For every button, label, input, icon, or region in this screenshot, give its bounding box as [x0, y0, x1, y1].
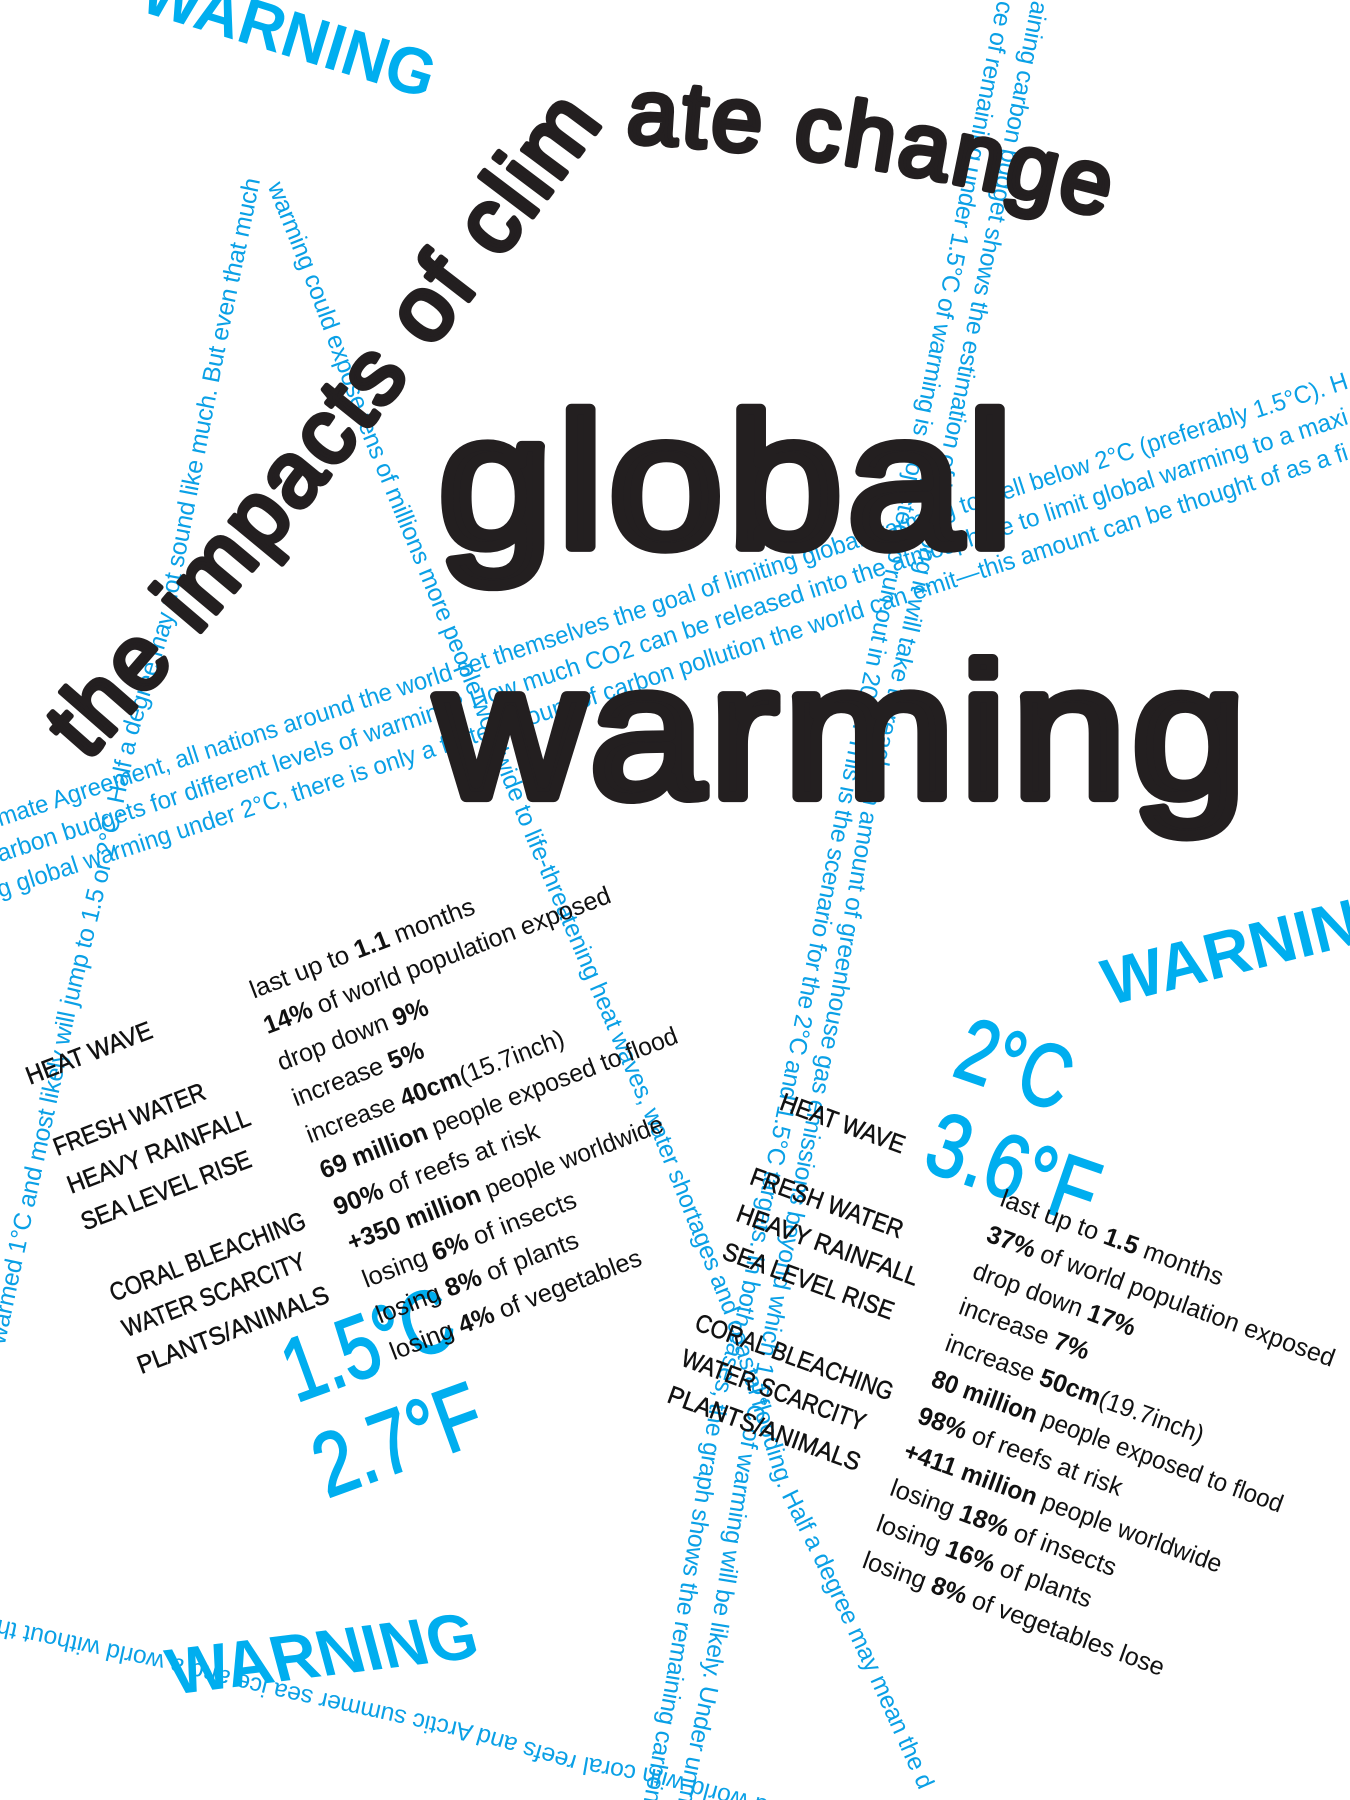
impact labels 1.5°C column: PLANTS/ANIMALS	[133, 1281, 333, 1380]
impact values 2°C column	[859, 1185, 1339, 1682]
impact labels 2°C column: HEAVY RAINFALL	[733, 1200, 922, 1291]
impact values 2°C column: last up to 1.5 months	[997, 1185, 1227, 1291]
impact labels 1.5°C column	[22, 1017, 333, 1380]
impact values 1.5°C column: 90% of reefs at risk	[330, 1117, 544, 1221]
impact labels 2°C column: CORAL BLEACHING	[691, 1309, 897, 1406]
impact values 1.5°C column: losing 6% of insects	[358, 1186, 581, 1294]
main title: global: global	[439, 375, 1013, 587]
impact values 1.5°C column: losing 4% of vegetables	[386, 1244, 646, 1366]
impact labels 1.5°C column: WATER SCARCITY	[118, 1247, 310, 1343]
impact values 1.5°C column: increase 40cm(15.7inch)	[302, 1025, 568, 1149]
ribbon: Paris agreement diagonal paragraph: arbon budgets for different levels of warming? How much CO2 can be released into the atmosphere to limit global warming to a maxi	[0, 404, 1350, 868]
curved subtitle: ate change: ate change	[628, 84, 1110, 220]
impact labels 1.5°C column: CORAL BLEACHING	[106, 1207, 310, 1307]
impact values 1.5°C column: +350 million people worldwide	[343, 1110, 667, 1257]
impact values 1.5°C column: last up to 1.1 months	[246, 893, 479, 1004]
impact values 2°C column: 37% of world population exposed	[983, 1220, 1339, 1373]
warning label bottom: WARNING	[159, 1598, 486, 1708]
impact values 2°C column: 98% of reefs at risk	[914, 1402, 1127, 1502]
temperature 1.5°C / 2.7°F: 1.5°C	[268, 1267, 467, 1421]
impact values 2°C column: increase 7%	[955, 1293, 1093, 1366]
impact values 1.5°C column: 14% of world population exposed	[260, 881, 615, 1040]
impact labels 2°C column: FRESH WATER	[746, 1163, 907, 1244]
impact values 2°C column: drop down 17%	[969, 1257, 1139, 1342]
impact values 1.5°C column: losing 8% of plants	[372, 1226, 583, 1329]
temperature 2°C / 3.6°F	[914, 998, 1112, 1243]
impact values 2°C column: losing 16% of plants	[873, 1510, 1096, 1614]
impact labels 1.5°C column: FRESH WATER	[50, 1078, 210, 1162]
impact labels 1.5°C column: HEAT WAVE	[22, 1017, 156, 1090]
ribbon: remaining carbon left strand: ce of remaining under 1.5°C of warming is projected to run out in 2020. This is the scenario for the 2°C and 1.5°C targets. In both cases, the graph shows the remaining carbon	[644, 2, 1010, 1800]
temperature 1.5°C / 2.7°F	[268, 1267, 495, 1516]
main title: warming: warming	[435, 626, 1246, 837]
impact labels 1.5°C column: HEAVY RAINFALL	[63, 1104, 254, 1199]
impact labels 1.5°C column: SEA LEVEL RISE	[77, 1145, 255, 1236]
impact labels 2°C column: SEA LEVEL RISE	[719, 1237, 898, 1325]
temperature 1.5°C / 2.7°F: 2.7°F	[299, 1363, 495, 1516]
impact values 1.5°C column: drop down 9%	[273, 993, 432, 1077]
impact values 2°C column: +411 million people worldwide	[900, 1437, 1226, 1579]
impact values 2°C column: 80 million people exposed to flood	[928, 1365, 1287, 1518]
impact values 1.5°C column: increase 5%	[288, 1036, 428, 1112]
impact values 2°C column: losing 8% of vegetables lose	[859, 1546, 1168, 1682]
impact labels 2°C column	[664, 1088, 922, 1477]
impact values 1.5°C column: 69 million people exposed to flood	[316, 1022, 682, 1185]
curved subtitle: the impacts of clim: the impacts of clim	[46, 100, 602, 757]
ribbon: warming impacts text descending: warming could expose tens of millions more people worldwide to life-threatening heat waves, water shortages and coastal flooding. Half a degree may mean the d	[268, 181, 936, 1790]
impact labels 2°C column: WATER SCARCITY	[678, 1344, 870, 1437]
impact labels 2°C column: PLANTS/ANIMALS	[664, 1381, 864, 1477]
temperature 2°C / 3.6°F: 2°C	[944, 998, 1085, 1130]
impact labels 2°C column: HEAT WAVE	[776, 1088, 909, 1159]
ribbon: carbon budget right strand: aining carbon budget shows the estimation of how long it will take to reach an amount of greenhouse gas emissions beyond which 1.5°C of warming will be likely. Under unm	[678, 2, 1047, 1800]
impact values 1.5°C column	[246, 881, 682, 1366]
impact values 2°C column: increase 50cm(19.7inch)	[942, 1329, 1208, 1449]
impact values 2°C column: losing 18% of insects	[886, 1474, 1120, 1582]
temperature 2°C / 3.6°F: 3.6°F	[914, 1092, 1112, 1243]
